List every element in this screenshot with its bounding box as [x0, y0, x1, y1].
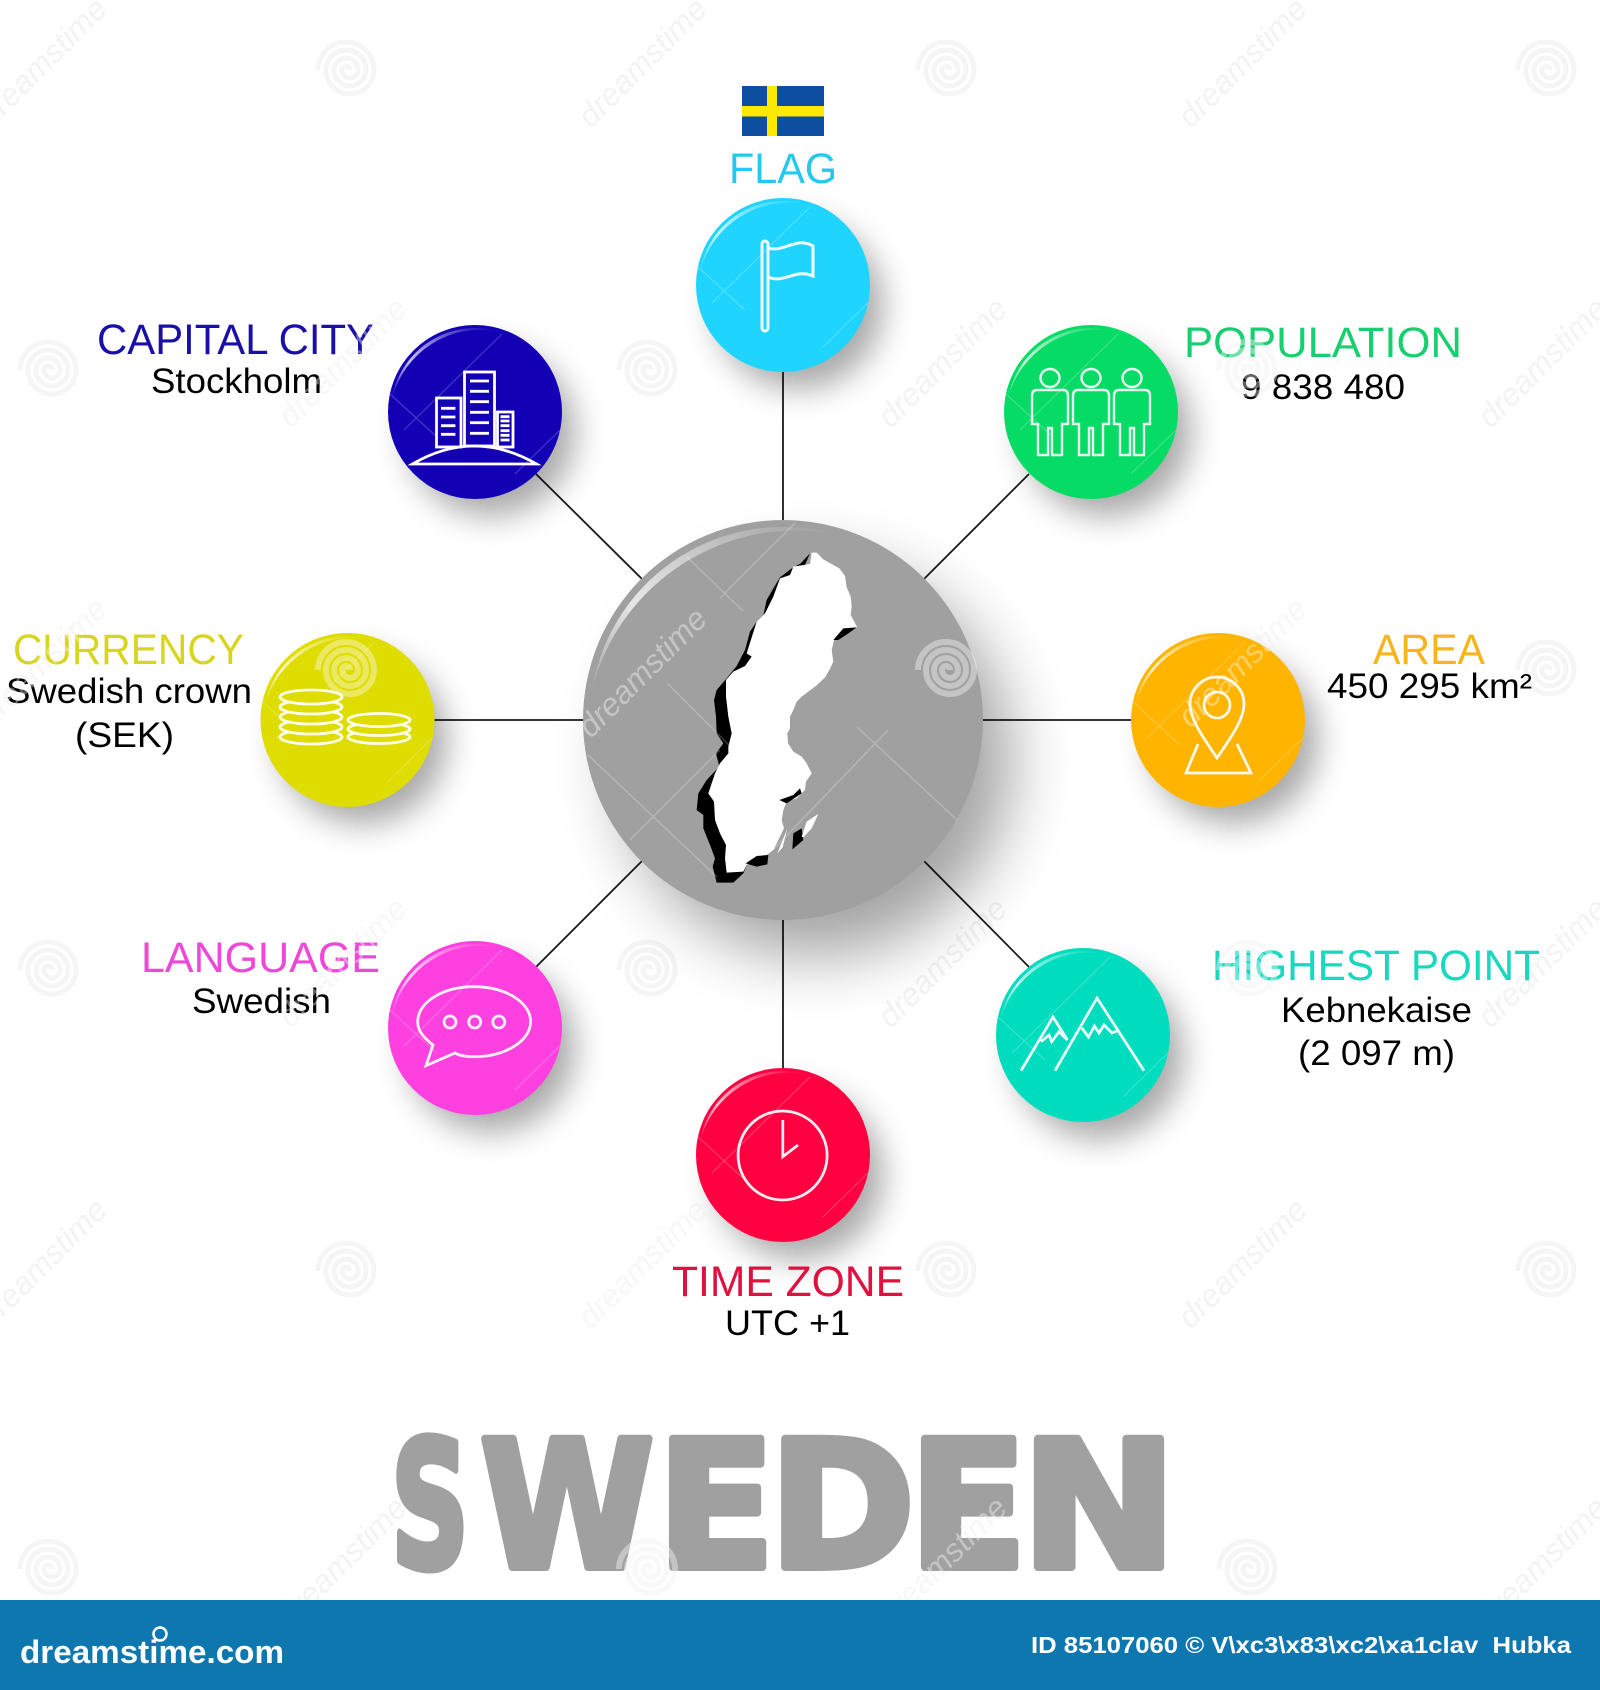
- label: population heading: POPULATION: [1184, 319, 1462, 367]
- text: dreamstime: [1170, 590, 1314, 734]
- text: dreamstime: [270, 890, 414, 1034]
- connector lines: [434, 372, 1131, 1068]
- icon: three people: [1032, 369, 1150, 455]
- text: dreamstime: [870, 890, 1014, 1034]
- value: Kebnekaise: Kebnekaise: [1281, 991, 1472, 1030]
- panel: language: [141, 934, 575, 1132]
- Swedish flag: [742, 86, 824, 136]
- icon: footer spiral logo: [154, 1628, 166, 1640]
- text: dreamstime: [1170, 590, 1314, 734]
- icon: mountains: [1021, 998, 1144, 1071]
- title: E: [909, 1404, 1027, 1609]
- title: S: [391, 1404, 469, 1609]
- value: SEK: (SEK): [75, 716, 174, 755]
- text: dreamstime: [870, 1489, 1014, 1633]
- map of Sweden: [697, 553, 857, 883]
- label: flag heading: FLAG: [729, 145, 837, 193]
- icon: city buildings: [412, 372, 536, 464]
- text: dreamstime: [270, 890, 414, 1034]
- value: Swedish: Swedish: [192, 982, 331, 1021]
- title: N: [1021, 1404, 1177, 1609]
- label: time zone heading: TIME ZONE: [672, 1258, 904, 1306]
- text: dreamstime: [270, 290, 414, 434]
- text: dreamstime: [1170, 1191, 1314, 1335]
- value: Stockholm: Stockholm: [151, 362, 322, 401]
- text: dreamstime: [270, 1489, 414, 1633]
- value: area size: 450 295 km²: [1327, 667, 1532, 706]
- text: dreamstime: [870, 290, 1014, 434]
- title: E: [657, 1404, 775, 1609]
- footer brand: dreamstime.com: [20, 1634, 284, 1670]
- panel: flag: [696, 86, 883, 389]
- panel: time zone: [672, 1068, 904, 1343]
- value: population count: 9 838 480: [1241, 368, 1405, 407]
- panel: population: [1004, 319, 1462, 516]
- icon: speech bubble: [418, 987, 531, 1066]
- label: area heading: AREA: [1373, 626, 1485, 674]
- text: dreamstime: [270, 290, 414, 434]
- text: dreamstime: [570, 1191, 714, 1335]
- icon: map pin: [1186, 677, 1251, 773]
- label: currency heading: CURRENCY: [13, 626, 244, 674]
- panel: capital city: [97, 316, 575, 516]
- icon: coin stacks: [280, 690, 410, 744]
- text: dreamstime: [570, 600, 714, 744]
- footer bar: [0, 1600, 1600, 1690]
- label: highest point heading: HIGHEST POINT: [1212, 942, 1540, 990]
- label: capital city heading: CAPITAL CITY: [97, 316, 374, 364]
- panel: central country disc: [583, 520, 1011, 956]
- panel: highest point: [996, 942, 1540, 1139]
- footer credit: ID 85107060 © V\xc3\x83\xc2\xa1clav Hubka: [1031, 1632, 1571, 1658]
- panel: currency: [6, 626, 447, 824]
- label: language heading: LANGUAGE: [141, 934, 380, 982]
- value: elevation: (2 097 m): [1298, 1034, 1455, 1073]
- title: D: [769, 1404, 915, 1609]
- icon: flag on pole: [762, 241, 813, 331]
- text: dreamstime: [570, 1191, 714, 1335]
- icon: clock: [738, 1111, 827, 1200]
- value: UTC +1: UTC +1: [725, 1304, 850, 1343]
- title: W: [480, 1404, 654, 1609]
- panel: area: [1131, 626, 1532, 824]
- value: Swedish crown: Swedish crown: [6, 672, 252, 711]
- text: dreamstime: [870, 1489, 1014, 1633]
